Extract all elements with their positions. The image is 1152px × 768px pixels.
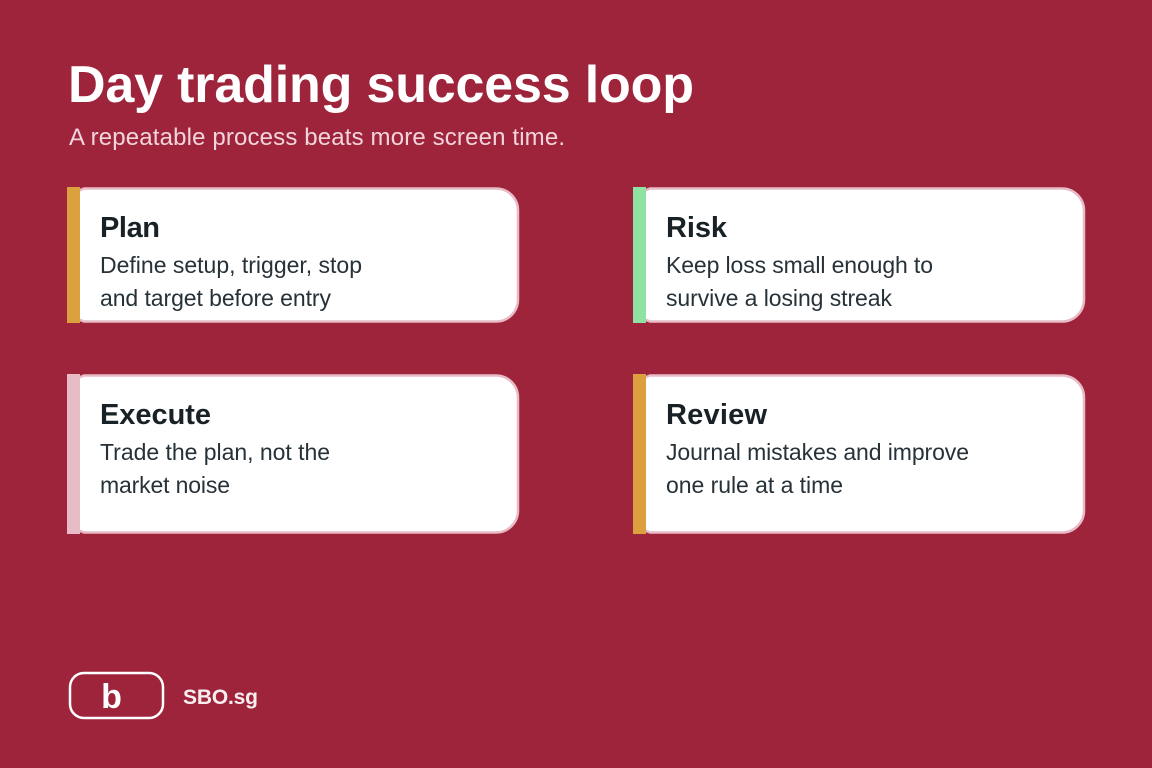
panel: Execute xyxy=(67,374,518,534)
panel: Plan xyxy=(67,187,518,323)
panel: Plan: Define setup, trigger, stop xyxy=(100,252,362,278)
panel: Execute: market noise xyxy=(100,472,230,498)
panel: Plan: and target before entry xyxy=(100,285,332,311)
panel: Risk: Risk xyxy=(666,212,728,244)
logo badge: b xyxy=(101,678,122,716)
panel: Risk: survive a losing streak xyxy=(666,285,892,311)
subtitle: A repeatable process beats more screen time. xyxy=(69,124,565,151)
panel: Risk: Keep loss small enough to xyxy=(666,252,933,278)
panel: Review: Review xyxy=(666,399,767,431)
brand name: SBO.sg xyxy=(183,686,258,709)
panel: Execute: Execute xyxy=(100,399,211,431)
panel: Plan: Plan xyxy=(100,212,160,244)
panel: Review: one rule at a time xyxy=(666,472,843,498)
panel: Review xyxy=(633,374,1084,534)
title: Day trading success loop xyxy=(68,56,694,114)
panel: Risk xyxy=(633,187,1084,323)
panel: Execute: Trade the plan, not the xyxy=(100,439,330,465)
panel: Review: Journal mistakes and improve xyxy=(666,439,969,465)
logo badge xyxy=(70,673,163,718)
